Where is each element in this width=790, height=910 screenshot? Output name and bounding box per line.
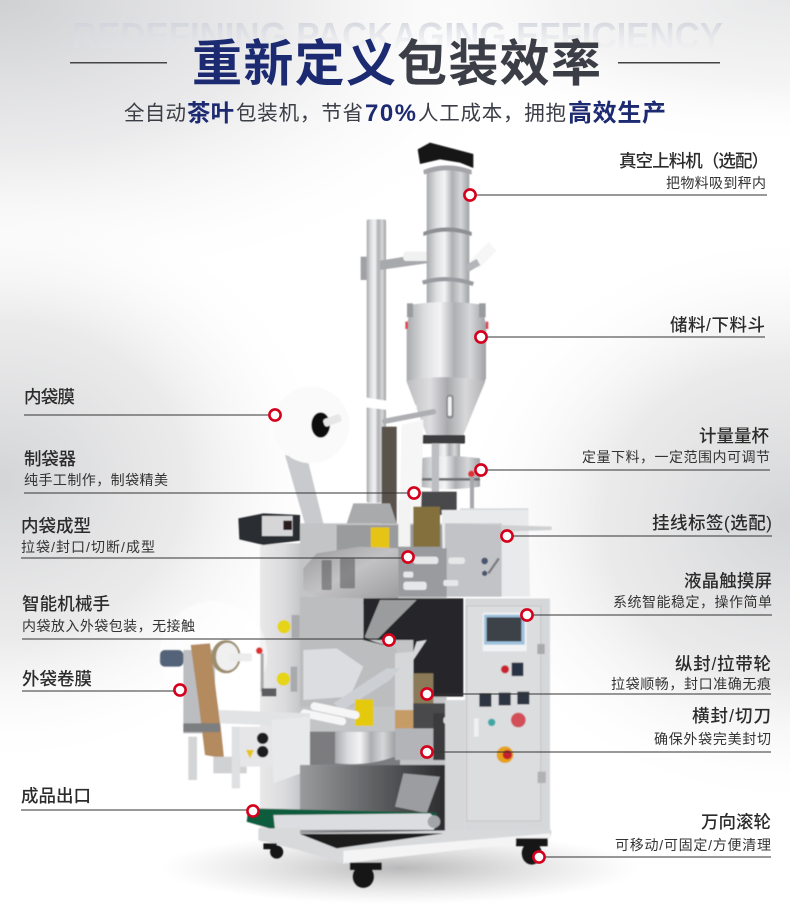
callout: 计量量杯 bbox=[475, 426, 770, 476]
callout: 真空上料机 bbox=[464, 151, 769, 201]
title: 包装效率 bbox=[397, 36, 601, 92]
callout: 万向滚轮 bbox=[533, 812, 771, 863]
control cabinet bbox=[465, 598, 550, 832]
callout: 制袋器 bbox=[24, 449, 420, 499]
rotary drum bbox=[310, 713, 460, 765]
callout: 智能机械手: 内袋放入外袋包装，无接触 bbox=[22, 618, 195, 634]
callout: 内袋成型 bbox=[21, 516, 414, 563]
neck bbox=[422, 435, 465, 444]
yellow knobs bbox=[277, 620, 291, 633]
back panel bbox=[300, 523, 447, 833]
subtitle: 包装机，节省 bbox=[236, 102, 363, 125]
sensor bbox=[471, 242, 497, 269]
base bbox=[258, 828, 552, 863]
callouts left bbox=[21, 387, 420, 817]
title rule right bbox=[618, 62, 720, 64]
callout: 制袋器: 纯手工制作，制袋精美 bbox=[24, 472, 168, 488]
controller box bbox=[238, 513, 300, 545]
callout: 横封/切刀 bbox=[421, 706, 771, 758]
callout: 智能机械手 bbox=[22, 594, 395, 646]
callout: 成品出口: 成品出口 bbox=[21, 786, 91, 806]
frame uprights bbox=[382, 427, 397, 530]
roller bar bbox=[382, 409, 437, 424]
motor bbox=[418, 143, 473, 168]
callout: 万向滚轮: 万向滚轮 bbox=[701, 812, 771, 832]
conveyor bbox=[247, 808, 440, 830]
lower opening bbox=[300, 765, 445, 833]
control buttons bbox=[501, 663, 523, 676]
cabinet frame bbox=[445, 700, 465, 833]
dark chamber bbox=[363, 598, 463, 697]
hopper bbox=[407, 302, 486, 435]
forming box bbox=[303, 547, 398, 598]
title bbox=[192, 36, 601, 92]
callout: 内袋膜: 内袋膜 bbox=[24, 387, 75, 407]
callout: 挂线标签 bbox=[501, 513, 772, 542]
callout: 真空上料机: 真空上料机（选配） bbox=[619, 151, 769, 171]
callout: 纵封/拉带轮: 纵封/拉带轮 bbox=[675, 654, 771, 674]
callout: 真空上料机: 把物料吸到秤内 bbox=[666, 175, 766, 191]
meters bbox=[479, 692, 529, 707]
callout: 储料/下料斗 bbox=[475, 315, 765, 343]
callout: 成品出口 bbox=[21, 786, 259, 817]
callout: 纵封/拉带轮 bbox=[421, 654, 771, 700]
callout: 纵封/拉带轮: 拉袋顺畅，封口准确无痕 bbox=[611, 676, 771, 692]
touch screen bbox=[483, 613, 527, 651]
machine upper: feeder bbox=[273, 143, 528, 530]
support pole bbox=[367, 219, 386, 503]
subtitle: 70% bbox=[365, 100, 416, 127]
header bbox=[70, 15, 723, 127]
subtitle: 茶叶 bbox=[187, 100, 234, 126]
callout: 计量量杯: 计量量杯 bbox=[699, 426, 770, 446]
subtitle: 高效生产 bbox=[568, 100, 666, 127]
callout: 外袋卷膜: 外袋卷膜 bbox=[22, 669, 92, 689]
callout: 计量量杯: 定量下料，一定范围内可调节 bbox=[582, 449, 770, 465]
column bbox=[260, 543, 300, 842]
title: 重新定义 bbox=[192, 36, 396, 92]
measuring cup bbox=[419, 456, 480, 489]
callout: 智能机械手: 智能机械手 bbox=[22, 594, 110, 614]
subtitle: 全自动 bbox=[124, 102, 186, 125]
casters bbox=[263, 838, 548, 888]
machine lower: body bbox=[159, 500, 552, 888]
subtitle: 人工成本，拥抱 bbox=[418, 102, 566, 125]
title rule left bbox=[70, 62, 167, 64]
callout: 挂线标签: 挂线标签(选配) bbox=[652, 513, 772, 533]
forming rollers bbox=[398, 548, 447, 597]
callout: 液晶触摸屏: 系统智能稳定，操作简单 bbox=[613, 594, 772, 610]
callout: 液晶触摸屏 bbox=[521, 571, 772, 621]
film strip bbox=[285, 455, 325, 530]
callout: 内袋膜 bbox=[24, 387, 281, 421]
upper section bbox=[337, 525, 443, 552]
central assembly bbox=[395, 640, 427, 713]
right translucent plate bbox=[442, 510, 530, 597]
callout: 外袋卷膜 bbox=[22, 669, 186, 696]
white film band bbox=[399, 419, 423, 530]
callout: 横封/切刀: 横封/切刀 bbox=[692, 706, 771, 726]
callout: 制袋器: 制袋器 bbox=[24, 449, 76, 469]
subtitle bbox=[124, 100, 666, 127]
callout: 内袋成型: 内袋成型 bbox=[21, 516, 91, 536]
vacuum tube bbox=[427, 170, 469, 307]
film roll bbox=[273, 387, 417, 463]
machine illustration bbox=[159, 143, 640, 904]
callout: 液晶触摸屏: 液晶触摸屏 bbox=[684, 571, 772, 591]
emergency stop bbox=[497, 746, 513, 763]
mid panel bbox=[300, 597, 397, 707]
ghost english title: REDEFINING PACKAGING EFFICIENCY bbox=[72, 15, 723, 56]
callout: 内袋成型: 拉袋/封口/切断/成型 bbox=[21, 539, 155, 555]
floor shadow bbox=[160, 832, 640, 904]
callout: 储料/下料斗: 储料/下料斗 bbox=[670, 315, 765, 335]
callout: 万向滚轮: 可移动/可固定/方便清理 bbox=[615, 837, 771, 853]
callout: 横封/切刀: 确保外袋完美封切 bbox=[654, 731, 771, 747]
white folding rollers bbox=[300, 702, 360, 726]
callouts right bbox=[421, 151, 772, 863]
outer-film unit bbox=[159, 601, 310, 788]
